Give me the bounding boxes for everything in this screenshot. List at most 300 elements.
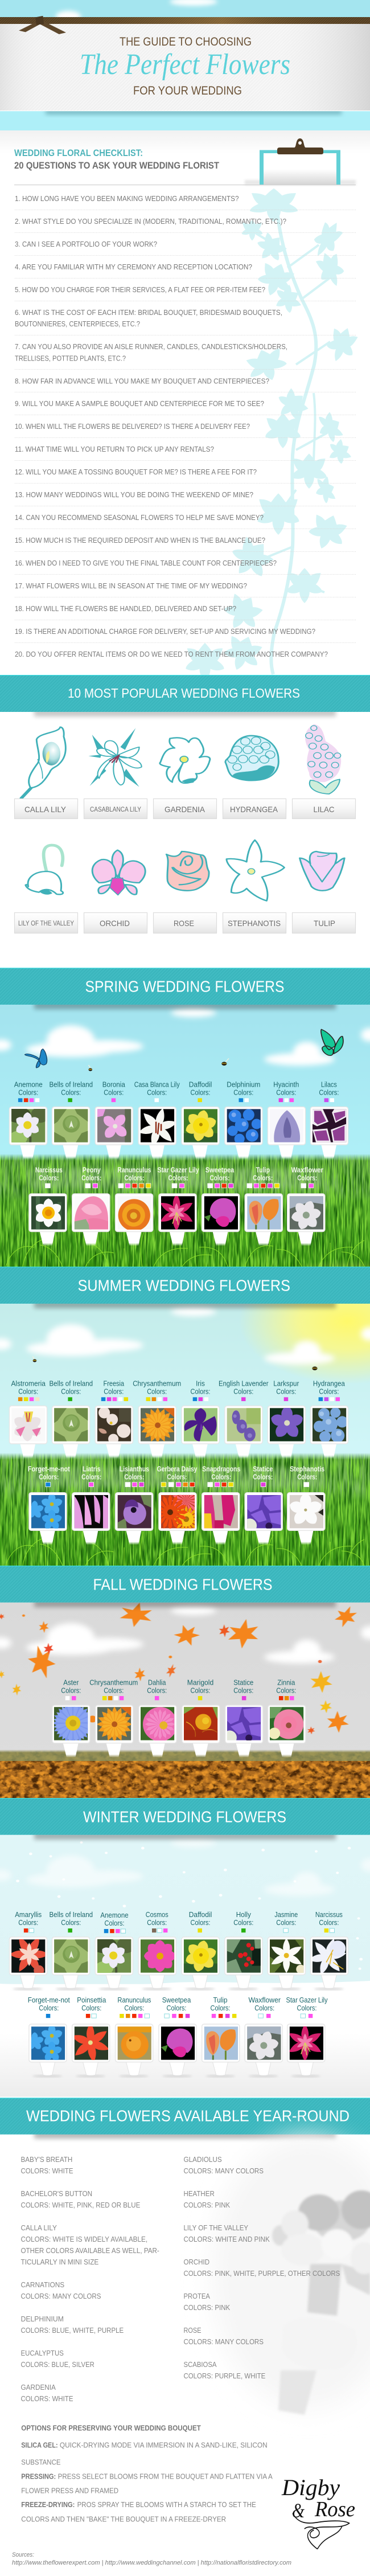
left column: COLORS: WHITE (20, 2395, 73, 2403)
heading banner: 10 MOST POPULAR WEDDING FLOWERS (68, 686, 300, 701)
label text: GARDENIA (165, 805, 205, 814)
question list: 4. ARE YOU FAMILIAR WITH MY CEREMONY AND RECEPTION LOCATION? (15, 263, 252, 271)
flower: freesia (95, 1379, 133, 1458)
heading banner (0, 675, 370, 712)
flower: daffodil: Colors: (190, 1918, 211, 1927)
snow ground (0, 1981, 370, 2098)
question list: 3. CAN I SEE A PORTFOLIO OF YOUR WORK? (15, 240, 157, 248)
flower: english lavender (219, 1379, 269, 1458)
right column: GLADIOLUS (183, 2156, 222, 2164)
flower: casa blanca lily: Colors: (147, 1088, 167, 1096)
flower: hydrangea (310, 1379, 348, 1458)
flower row 2 (25, 1464, 325, 1545)
right column: COLORS: PURPLE, WHITE (183, 2372, 265, 2380)
flower: star gazer lily: Star Gazer Lily (286, 1996, 328, 2004)
flower: statice: Colors: (233, 1686, 253, 1694)
right column: SCABIOSA (183, 2361, 217, 2369)
left column: CALLA LILY (20, 2224, 57, 2232)
flower: poinsettia (71, 1996, 110, 2077)
label text: LILAC (313, 805, 335, 814)
title: for your wedding: FOR YOUR WEDDING (133, 84, 242, 97)
flower: casa blanca lily (134, 1080, 182, 1159)
question list: 1. HOW LONG HAVE YOU BEEN MAKING WEDDING ARRANGEMENTS? (15, 194, 239, 203)
flower: iris: Iris (196, 1379, 205, 1387)
flower: waxflower (244, 1996, 283, 2077)
grass (0, 1453, 370, 1566)
question list: 19. IS THERE AN ADDITIONAL CHARGE FOR DELIVERY, SET-UP AND SERVICING MY WEDDING? (15, 627, 315, 636)
flower: marigold: Marigold (187, 1678, 213, 1686)
panel: year-round flowers (12, 2136, 370, 2566)
flower: narcissus (303, 1910, 351, 1990)
flower: snapdragons: Snapdragons (202, 1464, 240, 1473)
panel: winter scene (0, 1835, 370, 2098)
flower: statice (245, 1464, 282, 1545)
icon: orchid (92, 850, 145, 895)
flower row 1 (9, 1379, 348, 1458)
flower: dahlia (139, 1678, 177, 1757)
right column: COLORS: WHITE AND PINK (183, 2235, 270, 2243)
question list: 17. WHAT FLOWERS WILL BE IN SEASON AT THE TIME OF MY WEDDING? (15, 581, 247, 590)
flower: delphinium: Colors: (233, 1088, 253, 1096)
flower: boronia: Colors: (104, 1088, 124, 1096)
flower: amaryllis: Amaryllis (15, 1910, 42, 1919)
question list: 12. WILL YOU MAKE A TOSSING BOUQUET FOR ME? IS THERE A FEE FOR IT? (15, 468, 257, 476)
icon: bee (312, 1363, 320, 1370)
flower: star gazer lily: Colors: (297, 2004, 316, 2012)
flower: jasmine: Colors: (276, 1918, 296, 1927)
right column: ROSE (183, 2327, 202, 2335)
question list: 15. HOW MUCH IS THE REQUIRED DEPOSIT AND WHEN IS THE BALANCE DUE? (15, 536, 265, 544)
flower: forget-me-not: Colors: (39, 2004, 59, 2012)
flower: ranunculus (116, 1165, 153, 1246)
bouquet preservation options: PROS SPRAY THE BLOOMS WITH A STARCH TO SET THE (77, 2501, 256, 2509)
icon: hydrangea (225, 736, 278, 780)
flower: stephanotis: Stephanotis (290, 1464, 324, 1473)
flower: anemone (6, 1080, 49, 1159)
bouquet preservation options: OPTIONS FOR PRESERVING YOUR WEDDING BOUQUET (21, 2425, 201, 2432)
flower: lisianthus: Colors: (124, 1472, 144, 1481)
question list: 20. DO YOU OFFER RENTAL ITEMS OR DO WE NEED TO RENT THEM FROM ANOTHER COMPANY? (15, 650, 328, 658)
flower: lilacs: Colors: (319, 1088, 339, 1096)
snowflakes (16, 1841, 363, 1970)
panel: spring scene (0, 1005, 370, 1267)
icon: bee (221, 1058, 229, 1066)
banner shadow (34, 708, 336, 716)
flower: star gazer lily: Colors: (168, 1173, 188, 1182)
left column (20, 2156, 159, 2403)
icon: stephanotis (227, 840, 285, 901)
bouquet photo background (211, 2136, 370, 2415)
flower: narcissus: Colors: (319, 1918, 339, 1927)
flower: sweetpea (159, 1996, 196, 2077)
falling leaves (0, 1599, 360, 1734)
flower: lilacs: Lilacs (321, 1080, 337, 1088)
question list: TRELLISES, POTTED PLANTS, ETC.? (15, 354, 126, 362)
icon: calla lily (21, 727, 65, 798)
question list: 5. HOW DO YOU CHARGE FOR THEIR SERVICES, A FLAT FEE OR PER-ITEM FEE? (15, 285, 265, 294)
heading: fall (0, 1566, 370, 1603)
question list (15, 194, 356, 658)
flower: english lavender: Colors: (233, 1387, 253, 1395)
right column: COLORS: MANY COLORS (183, 2167, 264, 2175)
flower: daffodil: Daffodil (189, 1080, 212, 1088)
flower: chrysanthemum: Chrysanthemum (89, 1678, 138, 1686)
flower row 1 (3, 1910, 351, 1990)
flower: alstromeria (9, 1379, 47, 1458)
header: sky strip with clouds (0, 0, 370, 130)
flower: freesia: Freesia (104, 1379, 125, 1387)
flower: tulip (245, 1165, 282, 1246)
flower: bells of ireland (49, 1910, 93, 1990)
flower: cosmos (138, 1910, 176, 1990)
heading: spring: SPRING WEDDING FLOWERS (85, 978, 285, 996)
flower: gerbera daisy: Colors: (167, 1472, 187, 1481)
left column: COLORS: WHITE, PINK, RED OR BLUE (20, 2201, 140, 2209)
flower row 1 (6, 1080, 348, 1159)
label text: STEPHANOTIS (228, 919, 281, 928)
flower: larkspur: Larkspur (273, 1379, 299, 1387)
left column: COLORS: WHITE IS WIDELY AVAILABLE, (20, 2235, 147, 2243)
question list: 13. HOW MANY WEDDINGS WILL YOU BE DOING THE WEEKEND OF MINE? (15, 490, 253, 499)
right column (183, 2156, 340, 2380)
label text: TULIP (314, 919, 335, 928)
flower: narcissus: Colors: (39, 1173, 59, 1182)
ground of fallen leaves (0, 1750, 370, 1798)
icon: rose (166, 851, 209, 891)
flower: snapdragons (202, 1464, 240, 1545)
vine silhouette (186, 189, 360, 681)
label text: CASABLANCA LILY (90, 805, 141, 813)
question list: 16. WHEN DO I NEED TO GIVE YOU THE FINAL TABLE COUNT FOR CENTERPIECES? (15, 559, 277, 567)
label text (18, 805, 335, 928)
label text: ROSE (174, 919, 194, 928)
flower: tulip: Tulip (256, 1165, 270, 1174)
question list: BOUTONNIERES, CENTERPIECES, ETC.? (15, 320, 140, 328)
bouquet preservation options: FLOWER PRESS AND FRAMED (21, 2487, 118, 2495)
bouquet preservation options: PRESSING: (21, 2472, 56, 2480)
right column: COLORS: PINK (183, 2304, 231, 2312)
flower: bells of ireland: Bells of Ireland (49, 1910, 93, 1919)
left column: COLORS: MANY COLORS (20, 2292, 101, 2300)
flower: star gazer lily: Star Gazer Lily (157, 1165, 199, 1174)
flower: liatris: Liatris (83, 1464, 101, 1473)
flower: daffodil: Daffodil (189, 1910, 212, 1919)
flower: peony: Colors: (81, 1173, 101, 1182)
flower: forget-me-not (25, 1464, 70, 1545)
bouquet preservation options (21, 2425, 273, 2523)
flower: aster: Aster (63, 1678, 79, 1686)
flower: bells of ireland: Bells of Ireland (49, 1080, 93, 1088)
label text: HYDRANGEA (230, 805, 278, 814)
flower row 2 (25, 1996, 328, 2077)
flower: amaryllis (3, 1910, 56, 1990)
flower: iris: Colors: (190, 1387, 211, 1395)
flower: boronia (95, 1080, 135, 1159)
panel: checklist (0, 130, 370, 681)
flower: ranunculus: Colors: (124, 1173, 144, 1182)
label text: LILY OF THE VALLEY (18, 919, 74, 927)
flower: bells of ireland (49, 1080, 93, 1159)
flower: gerbera daisy (153, 1464, 201, 1545)
icon: casablanca lily (88, 728, 142, 787)
icon: lily of the valley (26, 845, 63, 895)
icon: bee (32, 1357, 36, 1362)
flower: hydrangea: Hydrangea (313, 1379, 346, 1387)
flower: cosmos: Cosmos (146, 1910, 168, 1919)
flower: waxflower: Colors: (297, 1173, 317, 1182)
flower: hyacinth (268, 1080, 305, 1159)
flower: narcissus: Narcissus (35, 1165, 63, 1174)
icon: lilac (305, 724, 341, 794)
flower: chrysanthemum: Colors: (147, 1387, 167, 1395)
flower: holly: Colors: (233, 1918, 253, 1927)
flower: star gazer lily (286, 1996, 328, 2077)
logo: digby and rose: Digby (281, 2475, 340, 2500)
flower: waxflower (286, 1165, 326, 1246)
flower: alstromeria: Colors: (18, 1387, 38, 1395)
flower: lisianthus (116, 1464, 153, 1545)
title: the perfect flowers: The Perfect Flowers (80, 48, 290, 81)
flower: sweetpea (202, 1165, 240, 1246)
left column: BABY'S BREATH (20, 2156, 72, 2164)
flower: boronia: Boronia (102, 1080, 125, 1088)
flower row 2 (29, 1165, 326, 1246)
flower: forget-me-not: Forget-me-not (28, 1464, 70, 1473)
checklist heading: WEDDING FLORAL CHECKLIST: (14, 148, 143, 158)
flower: iris (182, 1379, 219, 1458)
logo: digby and rose: Rose (314, 2497, 355, 2521)
flower: waxflower: Waxflower (291, 1165, 323, 1174)
bouquet preservation options: FREEZE-DRYING: (21, 2501, 75, 2509)
flower: forget-me-not (25, 1996, 70, 2077)
flower: english lavender: English Lavender (219, 1379, 269, 1387)
flower: tulip: Colors: (253, 1173, 273, 1182)
flower: tulip: Tulip (213, 1996, 228, 2004)
flower: anemone (92, 1911, 135, 1990)
flower: hyacinth: Hyacinth (273, 1080, 299, 1088)
flower: marigold: Colors: (190, 1686, 211, 1694)
flower: lisianthus: Lisianthus (120, 1464, 149, 1473)
header banner (0, 16, 370, 111)
flower: holly: Holly (236, 1910, 251, 1919)
flower: bells of ireland: Bells of Ireland (49, 1379, 93, 1387)
bouquet preservation options: COLORS AND THEN "BAKE" THE BOUQUET IN A FREEZE-DRYER (21, 2515, 226, 2523)
flower: freesia: Colors: (104, 1387, 124, 1395)
flower: statice (225, 1678, 263, 1757)
icon: blue butterfly (25, 1049, 47, 1068)
flower: ranunculus (116, 1996, 153, 2077)
checklist heading (14, 148, 220, 171)
flower: sweetpea: Sweetpea (162, 1996, 191, 2004)
panel: summer scene (0, 1259, 370, 1566)
question list: 10. WHEN WILL THE FLOWERS BE DELIVERED? IS THERE A DELIVERY FEE? (15, 422, 250, 431)
flower: ranunculus: Ranunculus (117, 1996, 151, 2004)
flower: liatris (72, 1464, 110, 1545)
heading: fall: FALL WEDDING FLOWERS (93, 1576, 272, 1594)
right column: COLORS: MANY COLORS (183, 2338, 264, 2346)
flower: waxflower: Waxflower (248, 1996, 281, 2004)
flower: anemone: Anemone (100, 1911, 129, 1919)
flower: waxflower: Colors: (254, 2004, 274, 2012)
flower: dahlia: Dahlia (148, 1678, 166, 1686)
question list: 6. WHAT IS THE COST OF EACH ITEM: BRIDAL BOUQUET, BRIDESMAID BOUQUETS, (15, 308, 282, 317)
flower: bells of ireland: Colors: (61, 1387, 81, 1395)
left column: COLORS: BLUE, WHITE, PURPLE (20, 2327, 124, 2335)
left column: OTHER COLORS AVAILABLE AS WELL, PAR- (20, 2247, 159, 2255)
flower: poinsettia: Colors: (81, 2004, 101, 2012)
question list: 8. HOW FAR IN ADVANCE WILL YOU MAKE MY BOUQUET AND CENTERPIECES? (15, 377, 269, 385)
flower name labels (15, 798, 355, 933)
panel: fall scene (0, 1599, 370, 1799)
flower: snapdragons: Colors: (211, 1472, 231, 1481)
flower: aster: Colors: (61, 1686, 81, 1694)
flower: sweetpea: Colors: (209, 1173, 230, 1182)
ribbon bow (19, 16, 66, 34)
panel: 10 most popular flowers (0, 675, 370, 933)
flower: ranunculus: Colors: (124, 2004, 144, 2012)
question list: 2. WHAT STYLE DO YOU SPECIALIZE IN (MODERN, TRADITIONAL, ROMANTIC, ETC.)? (15, 217, 286, 226)
sources (12, 2552, 291, 2566)
heading: summer: SUMMER WEDDING FLOWERS (77, 1277, 290, 1295)
flower: sweetpea: Colors: (166, 2004, 187, 2012)
question list: 14. CAN YOU RECOMMEND SEASONAL FLOWERS TO HELP ME SAVE MONEY? (15, 513, 264, 522)
flower: chrysanthemum: Chrysanthemum (133, 1379, 181, 1387)
grass (0, 1154, 370, 1267)
icon: bee (88, 1065, 92, 1071)
flower: anemone: Colors: (18, 1088, 38, 1096)
label text: CALLA LILY (24, 805, 67, 814)
flower: hydrangea: Colors: (319, 1387, 339, 1395)
heading: winter (0, 1798, 370, 1835)
flower: casa blanca lily: Casa Blanca Lily (134, 1080, 180, 1088)
flower: larkspur: Colors: (276, 1387, 296, 1395)
flower: liatris: Colors: (81, 1472, 101, 1481)
flower: peony: Peony (83, 1165, 101, 1174)
flower: tulip: Colors: (211, 2004, 230, 2012)
bouquet preservation options: PRESS SELECT BLOOMS FROM THE BOUQUET AND FLATTEN VIA A (58, 2472, 273, 2480)
right column: LILY OF THE VALLEY (183, 2224, 249, 2232)
logo: digby and rose (281, 2475, 355, 2549)
heading: winter: WINTER WEDDING FLOWERS (83, 1808, 286, 1825)
right column: ORCHID (183, 2258, 209, 2266)
right column: COLORS: PINK, WHITE, PURPLE, OTHER COLORS (183, 2270, 340, 2278)
flower: sweetpea: Sweetpea (205, 1165, 235, 1174)
flower: bells of ireland: Colors: (61, 1088, 81, 1096)
flower: delphinium: Delphinium (227, 1080, 260, 1088)
flower: alstromeria: Alstromeria (11, 1379, 46, 1387)
flower: poinsettia: Poinsettia (77, 1996, 106, 2004)
flower: hyacinth: Colors: (276, 1088, 296, 1096)
title: the guide to choosing: THE GUIDE TO CHOOSING (120, 35, 252, 48)
flower: bells of ireland (49, 1379, 93, 1458)
logo: digby and rose: & (292, 2499, 305, 2522)
flower: daffodil (182, 1910, 220, 1990)
flower: zinnia (268, 1678, 306, 1757)
flower: tulip (202, 1996, 240, 2077)
bouquet preservation options: SILICA GEL: (21, 2442, 58, 2450)
bouquet preservation options: QUICK-DRYING MODE VIA IMMERSION IN A SAND-LIKE, SILICON (60, 2442, 268, 2450)
flower: forget-me-not: Colors: (39, 1472, 59, 1481)
flower: chrysanthemum: Colors: (104, 1686, 124, 1694)
left column: COLORS: WHITE (20, 2167, 73, 2175)
icon: tulip (299, 851, 344, 891)
brown ribbon (0, 17, 370, 24)
flower: narcissus (29, 1165, 67, 1246)
flower: zinnia: Colors: (276, 1686, 296, 1694)
flower: daffodil (182, 1080, 220, 1159)
flower: stephanotis: Colors: (297, 1472, 317, 1481)
flower row (50, 1678, 306, 1757)
heading: summer (0, 1267, 370, 1304)
question list: 7. CAN YOU ALSO PROVIDE AN AISLE RUNNER, CANDLES, CANDLESTICKS/HOLDERS, (15, 342, 287, 351)
left column: EUCALYPTUS (20, 2349, 64, 2357)
banner shadows (34, 1001, 336, 2139)
flower: marigold (182, 1678, 220, 1757)
flower: anemone: Anemone (14, 1080, 43, 1088)
bouquet preservation options: SUBSTANCE (21, 2458, 60, 2466)
checklist heading: 20 QUESTIONS TO ASK YOUR WEDDING FLORIST (14, 160, 220, 171)
flower: statice: Statice (233, 1678, 253, 1686)
flower: larkspur (268, 1379, 305, 1458)
left column: DELPHINIUM (20, 2315, 64, 2323)
flower: delphinium (225, 1080, 262, 1159)
question list: 11. WHAT TIME WILL YOU RETURN TO PICK UP ANY RENTALS? (15, 445, 214, 453)
flower: cosmos: Colors: (147, 1918, 167, 1927)
flower: zinnia: Zinnia (277, 1678, 295, 1686)
flower: peony (72, 1165, 110, 1246)
question list: 18. HOW WILL THE FLOWERS BE HANDLED, DELIVERED AND SET-UP? (15, 604, 236, 613)
sources: http://www.theflowerexpert.com | http://www.weddingchannel.com | http://nationalfloristdirectory.com (12, 2559, 291, 2566)
right column: PROTEA (183, 2292, 210, 2300)
question list: 9. WILL YOU MAKE A SAMPLE BOUQUET AND CENTERPIECE FOR ME TO SEE? (15, 399, 264, 408)
flower: jasmine: Jasmine (274, 1910, 298, 1919)
flower: aster (50, 1678, 96, 1757)
left column: GARDENIA (20, 2383, 56, 2391)
flower: amaryllis: Colors: (18, 1918, 38, 1927)
flower: statice: Statice (253, 1464, 273, 1473)
right column: COLORS: PINK (183, 2201, 231, 2209)
left column: TICULARLY IN MINI SIZE (20, 2258, 98, 2266)
flower: holly (225, 1910, 262, 1990)
flower: gerbera daisy: Gerbera Daisy (157, 1464, 198, 1473)
left column: BACHELOR'S BUTTON (20, 2190, 92, 2198)
flower: bells of ireland: Colors: (61, 1918, 81, 1927)
flower: stephanotis (287, 1464, 325, 1545)
left column: CARNATIONS (20, 2281, 64, 2289)
icon: clipboard (245, 138, 356, 185)
flower: lilacs (310, 1080, 348, 1159)
sources: Sources: (12, 2552, 34, 2558)
icon: green butterfly (321, 1029, 343, 1055)
flower: dahlia: Colors: (147, 1686, 167, 1694)
flower: narcissus: Narcissus (315, 1910, 343, 1919)
left column: COLORS: BLUE, SILVER (20, 2361, 94, 2369)
flower: chrysanthemum (89, 1678, 138, 1757)
flower: statice: Colors: (253, 1472, 273, 1481)
flower: chrysanthemum (133, 1379, 181, 1458)
flower: star gazer lily (157, 1165, 199, 1246)
label text: ORCHID (100, 919, 130, 928)
heading: year-round (0, 2098, 370, 2135)
flower: daffodil: Colors: (190, 1088, 211, 1096)
flower: anemone: Colors: (105, 1919, 124, 1927)
heading: spring (0, 968, 370, 1005)
flower: ranunculus: Ranunculus (117, 1165, 151, 1174)
flower: jasmine (268, 1910, 305, 1990)
right column: HEATHER (183, 2190, 215, 2198)
flower: forget-me-not: Forget-me-not (28, 1996, 70, 2004)
icon: gardenia (160, 738, 210, 783)
